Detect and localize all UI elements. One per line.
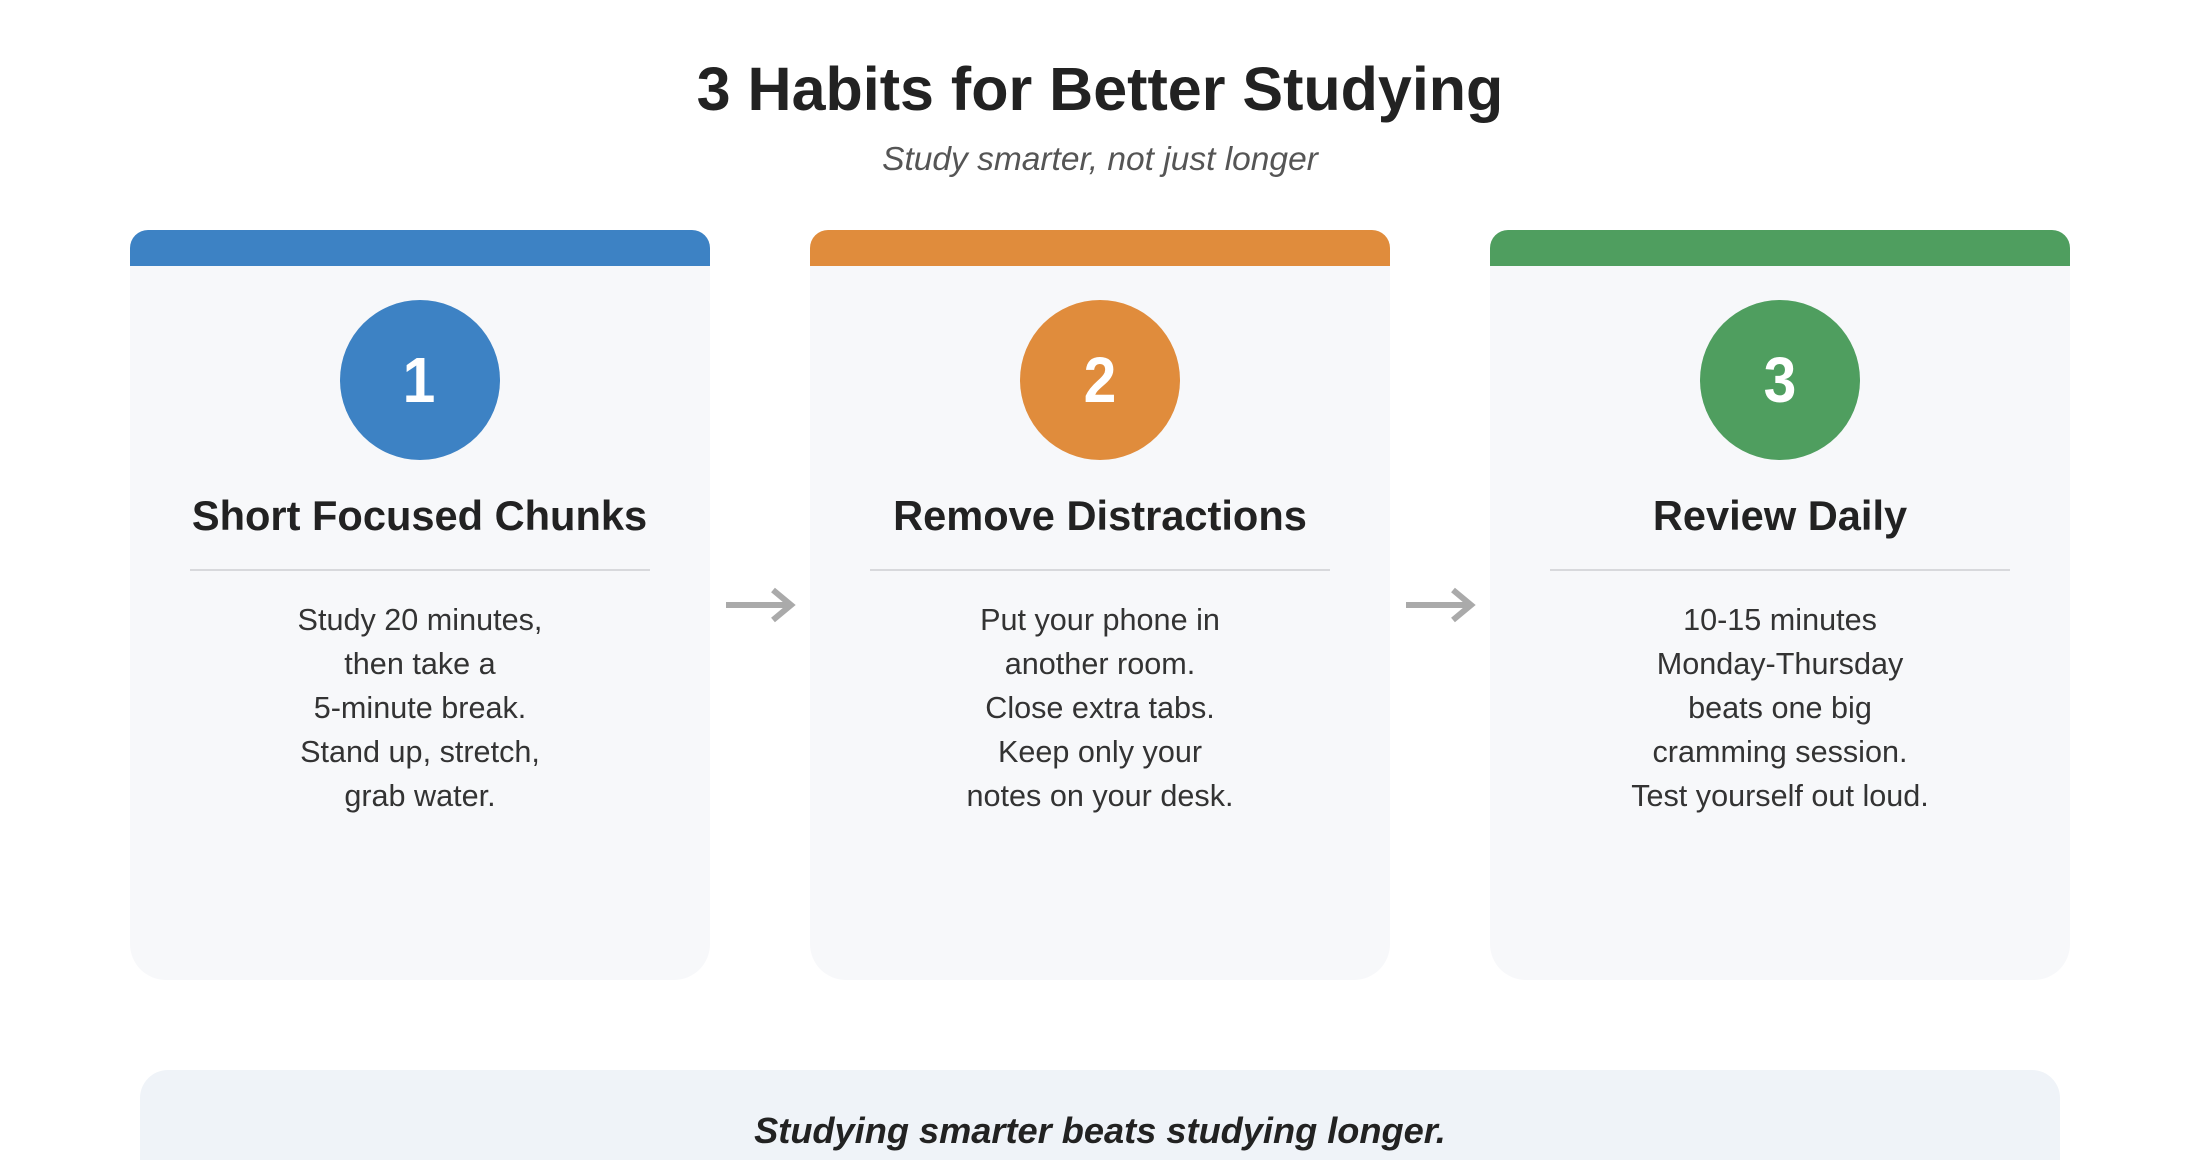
panel: habit 3 review daily: [1490, 230, 2070, 980]
panel background: [810, 230, 1390, 980]
body text: 10-15 minutes: [1683, 603, 1877, 637]
heading: Review Daily: [1653, 492, 1907, 539]
body text: [1631, 603, 1929, 813]
body text: Keep only your: [998, 735, 1202, 769]
body text: beats one big: [1688, 691, 1872, 725]
callout banner: [140, 1070, 2060, 1160]
subtitle: Study smarter, not just longer: [882, 141, 1320, 178]
body text: then take a: [344, 647, 497, 681]
title: 3 Habits for Better Studying: [697, 55, 1503, 123]
body text: cramming session.: [1652, 735, 1908, 769]
panel: habit 2 remove distractions: [810, 230, 1390, 980]
body text: [966, 603, 1234, 813]
number badge 1: [340, 300, 500, 460]
banner text: Studying smarter beats studying longer.: [754, 1110, 1446, 1151]
body text: Stand up, stretch,: [300, 735, 540, 769]
body text: Close extra tabs.: [985, 691, 1215, 725]
body text: notes on your desk.: [966, 779, 1234, 813]
panel background: [1490, 230, 2070, 980]
panel header bar: [810, 230, 1390, 266]
body text: Monday-Thursday: [1657, 647, 1904, 681]
body text: 5-minute break.: [314, 691, 526, 725]
number badge 3: 3: [1764, 344, 1796, 416]
arrow 2 to 3: [1406, 590, 1471, 620]
body text: Test yourself out loud.: [1631, 779, 1929, 813]
body text: grab water.: [344, 779, 496, 813]
arrow 1 to 2: [726, 590, 791, 620]
body text: [298, 603, 542, 813]
heading: Short Focused Chunks: [192, 492, 647, 539]
panel: habit 1 short focused chunks: [130, 230, 710, 980]
body text: Put your phone in: [980, 603, 1220, 637]
heading: Remove Distractions: [893, 492, 1307, 539]
number badge 2: [1020, 300, 1180, 460]
panel header bar: [130, 230, 710, 266]
banner background: [140, 1070, 2060, 1160]
panel background: [130, 230, 710, 980]
panel header bar: [1490, 230, 2070, 266]
body text: another room.: [1005, 647, 1195, 681]
number badge 3: [1700, 300, 1860, 460]
number badge 1: 1: [403, 344, 435, 416]
number badge 2: 2: [1084, 344, 1116, 416]
body text: Study 20 minutes,: [298, 603, 542, 637]
